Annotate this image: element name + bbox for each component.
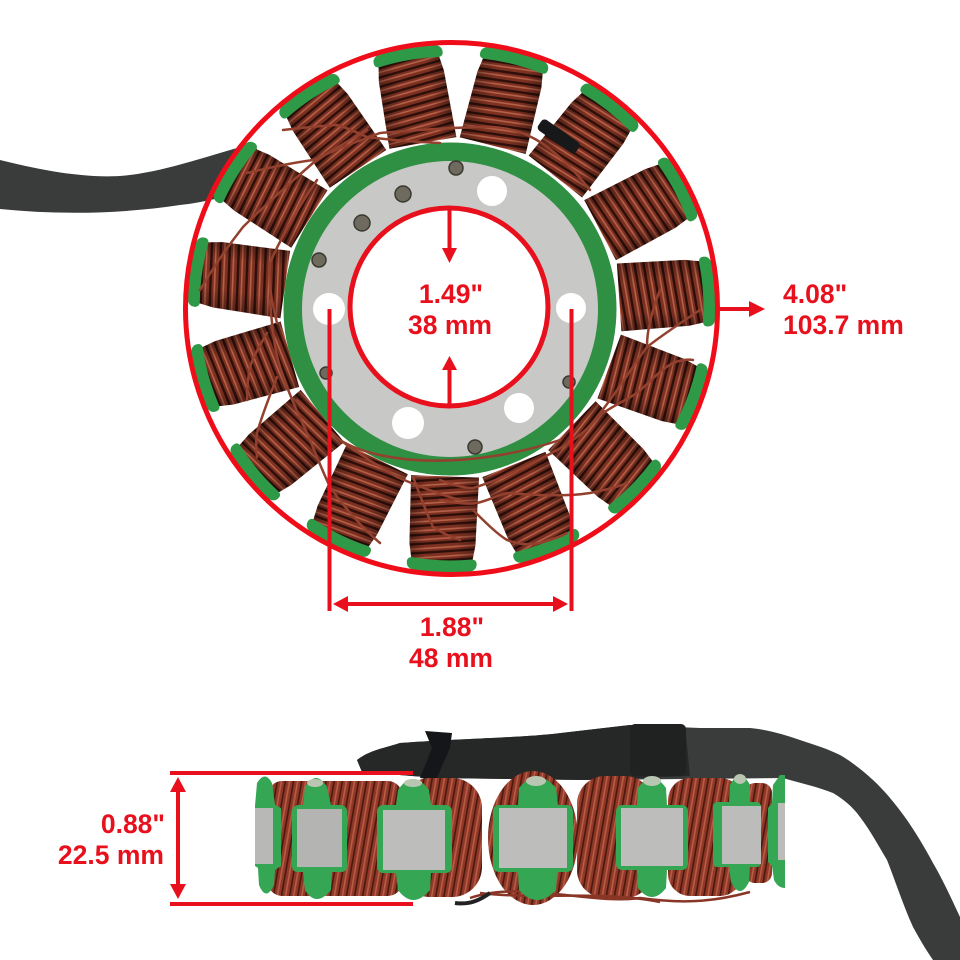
bottom lead wires xyxy=(455,891,750,903)
dimension: stator height xyxy=(170,771,413,906)
label: outer diameter: 4.08" xyxy=(783,279,847,309)
side view: stator from the edge xyxy=(255,724,960,960)
dimension: bolt hole spacing xyxy=(328,309,574,612)
label: inner diameter xyxy=(408,279,492,340)
green tooth 2 xyxy=(292,778,347,899)
label: bolt hole spacing: 48 mm xyxy=(409,643,493,673)
green tooth 1 xyxy=(255,776,281,894)
green tooth 4 xyxy=(493,776,573,900)
green tooth 7 xyxy=(768,775,785,888)
dimension: inner diameter circle xyxy=(350,208,548,406)
green tooth 3 xyxy=(377,779,452,900)
cable: left lead behind stator xyxy=(0,143,268,213)
label: outer diameter xyxy=(783,279,904,340)
dimension: outer diameter circle xyxy=(186,42,718,574)
rivets xyxy=(312,161,575,454)
label: inner diameter: 1.49" xyxy=(419,279,483,309)
label: bolt hole spacing: 1.88" xyxy=(420,612,484,642)
arrow: inner diameter top xyxy=(442,210,457,263)
metal ring xyxy=(302,161,598,457)
green core ring xyxy=(293,152,607,466)
label: bolt hole spacing xyxy=(409,612,493,673)
coil windings xyxy=(268,771,772,905)
green tooth 5 xyxy=(616,776,688,897)
label: stator height: 22.5 mm xyxy=(58,840,164,870)
arrow: inner diameter bottom xyxy=(442,356,457,405)
green tooth 6 xyxy=(713,774,761,891)
arrow: outer diameter xyxy=(718,301,765,317)
label: inner diameter: 38 mm xyxy=(408,310,492,340)
label: stator height: 0.88" xyxy=(101,809,165,839)
zip tie xyxy=(420,731,452,780)
coils: 15 copper windings xyxy=(185,42,717,574)
cable and bundled leads xyxy=(357,724,960,960)
zip tie xyxy=(536,118,581,155)
label: outer diameter: 103.7 mm xyxy=(783,310,904,340)
mounting holes xyxy=(313,176,586,439)
label: stator height xyxy=(58,809,165,870)
loose connecting wires xyxy=(200,125,700,544)
stator: top view xyxy=(185,42,717,574)
